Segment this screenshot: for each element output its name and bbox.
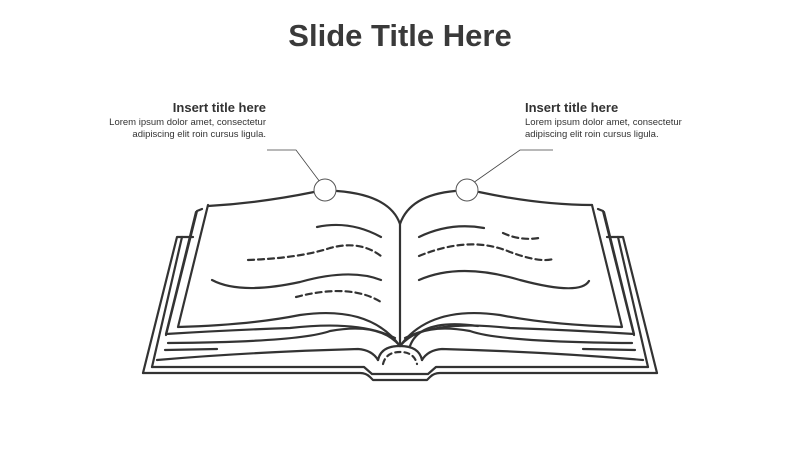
title: Slide Title Here: [288, 18, 512, 53]
callout connectors: [267, 150, 553, 183]
text block: right: Lorem ipsum dolor amet, consectetur adipiscing elit roin cursus ligula.: [525, 117, 682, 140]
text lines: [212, 225, 589, 302]
text block: right: Insert title here: [525, 100, 618, 115]
text block: left: Lorem ipsum dolor amet, consectetur adipiscing elit roin cursus ligula.: [109, 117, 266, 140]
cover and base: [143, 209, 657, 380]
callout circles: [314, 179, 478, 201]
text block: left: Insert title here: [173, 100, 266, 115]
pages: [165, 191, 635, 364]
text block: left: [109, 100, 266, 140]
text block: right: [525, 100, 682, 140]
